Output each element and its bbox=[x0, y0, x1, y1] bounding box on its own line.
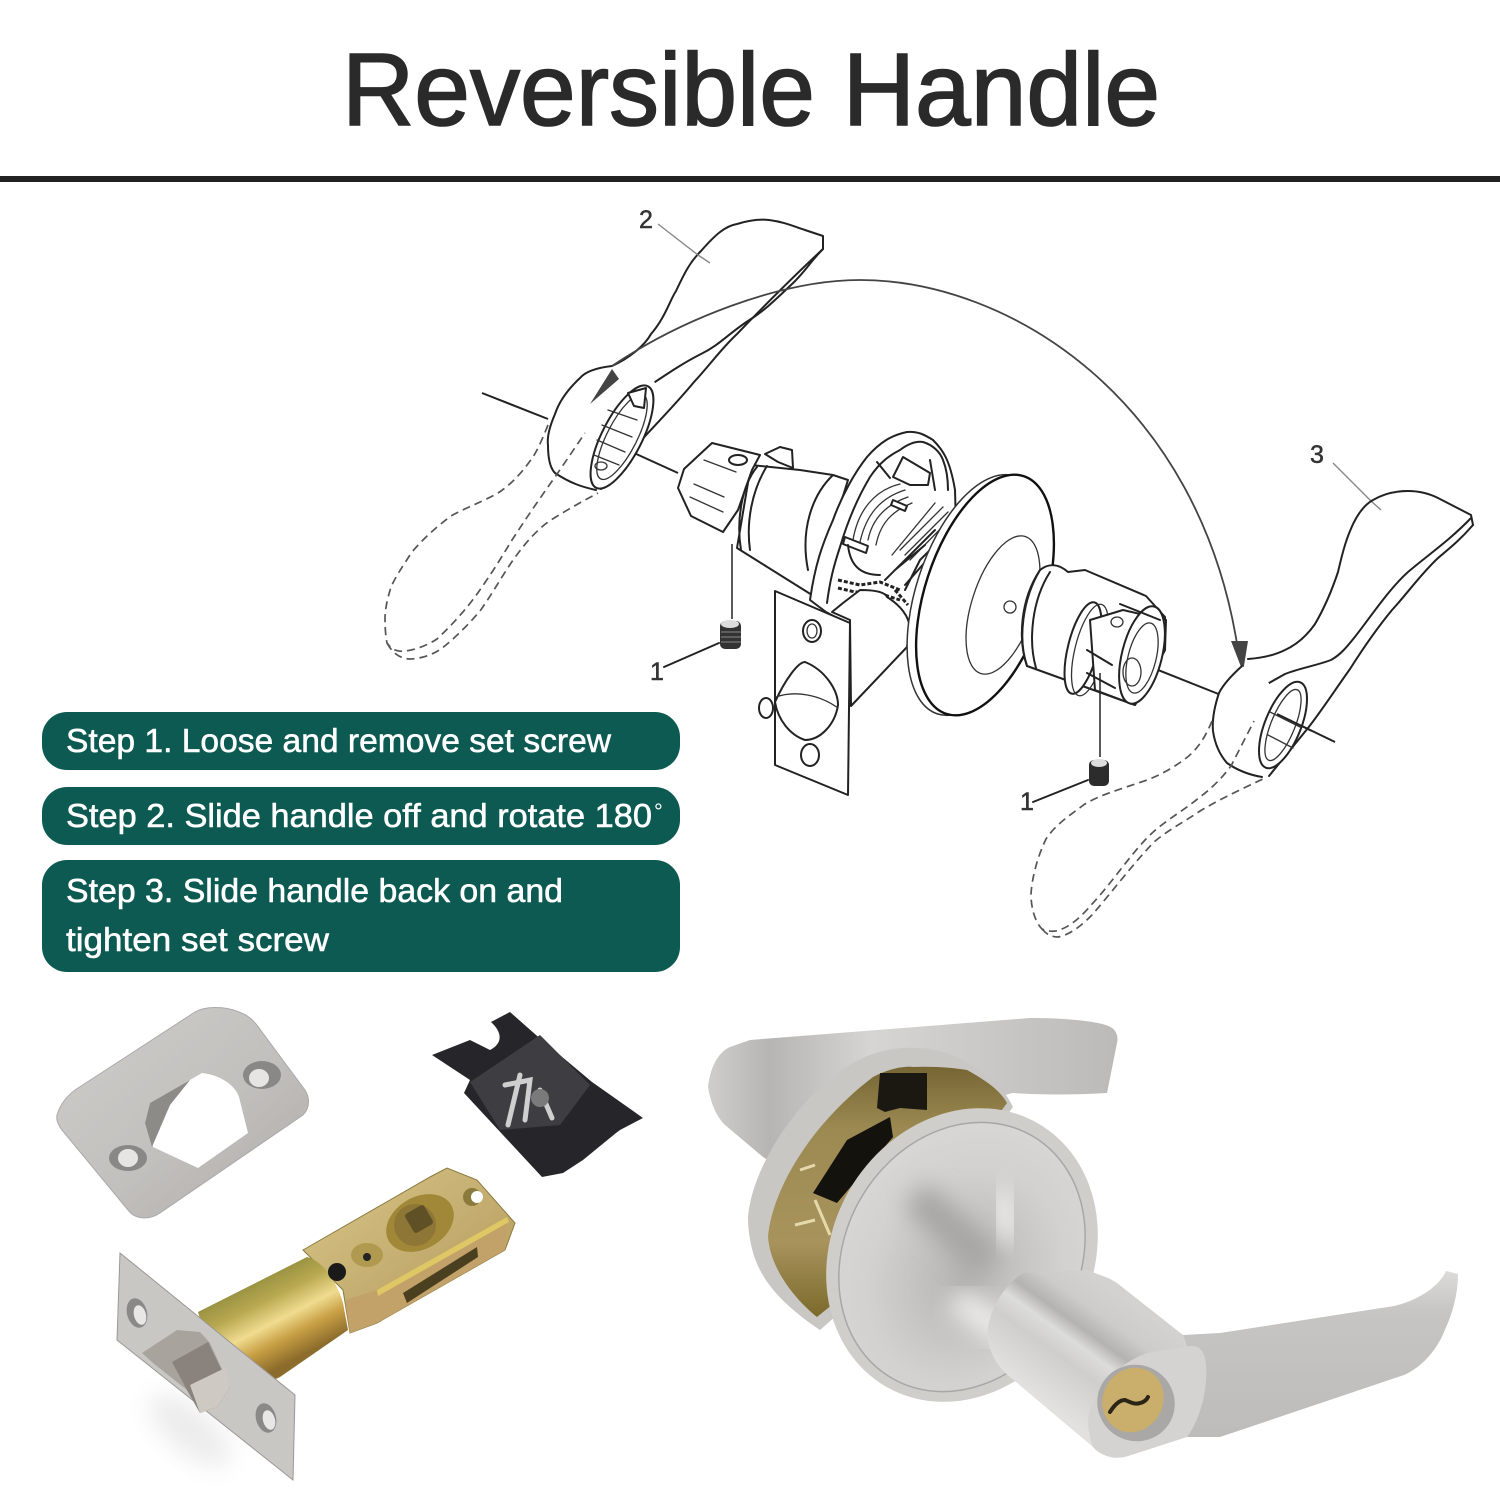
label 3: 3 bbox=[1310, 441, 1324, 469]
step 1 pill: Step 1. Loose and remove set screw bbox=[66, 722, 611, 759]
front rose bbox=[773, 1058, 1151, 1452]
photo: latch bolt bbox=[117, 1168, 515, 1480]
step 3 pill bbox=[42, 860, 680, 972]
central chassis with mechanism bbox=[810, 432, 958, 706]
key end cap bbox=[1088, 1346, 1206, 1458]
header rule bbox=[0, 176, 1500, 182]
handle 2, dashed alternate position bbox=[385, 425, 598, 659]
step 2 pill: ° bbox=[654, 799, 663, 824]
step 3 pill: Step 3. Slide handle back on and bbox=[66, 872, 563, 909]
keyway bbox=[1083, 1351, 1189, 1455]
exploded lever diagram bbox=[385, 206, 1473, 937]
face plate bbox=[117, 1253, 295, 1480]
photo: keyed lever bbox=[708, 1018, 1458, 1458]
step 3 pill: tighten set screw bbox=[66, 921, 329, 958]
photo: strike plate bbox=[57, 1008, 309, 1218]
latch case bbox=[303, 1168, 515, 1333]
barrel bbox=[198, 1257, 348, 1395]
leader line 1, left bbox=[664, 643, 719, 667]
rear lever bbox=[708, 1018, 1117, 1180]
axis lines bbox=[482, 393, 1335, 742]
step 2 pill: Step 2. Slide handle off and rotate 180 bbox=[66, 797, 652, 834]
label 1, right: 1 bbox=[1020, 788, 1034, 816]
neck highlights bbox=[915, 1195, 990, 1265]
label 1, left: 1 bbox=[650, 658, 664, 686]
label 2: 2 bbox=[639, 206, 653, 234]
left spindle bbox=[678, 443, 848, 595]
latch face plate bbox=[759, 591, 850, 795]
barrel and shank bbox=[987, 1270, 1208, 1458]
photo: screw bag bbox=[432, 1012, 643, 1177]
rose plate, right bbox=[880, 458, 1081, 732]
lever blade bbox=[1183, 1271, 1458, 1437]
step 2 pill bbox=[42, 787, 680, 845]
handle 3, dashed alternate position bbox=[1031, 721, 1265, 937]
right spindle bbox=[1022, 565, 1174, 708]
leader line 3 bbox=[1333, 463, 1381, 510]
rear rose and brass mechanism bbox=[748, 1048, 1013, 1330]
set screw, right bbox=[1089, 673, 1109, 786]
set screw, left bbox=[720, 544, 741, 649]
rotation arc arrow bbox=[590, 280, 1248, 672]
handle 2, removed position bbox=[548, 220, 823, 497]
bolt bbox=[142, 1330, 230, 1413]
title: Reversible Handle bbox=[342, 32, 1160, 147]
leader line 1, right bbox=[1033, 780, 1088, 802]
leader line 2 bbox=[658, 224, 710, 263]
handle 3, installed position bbox=[1213, 491, 1473, 777]
soft shadow bbox=[138, 1381, 242, 1479]
spindle and holes bbox=[376, 1182, 464, 1264]
step 1 pill bbox=[42, 712, 680, 770]
